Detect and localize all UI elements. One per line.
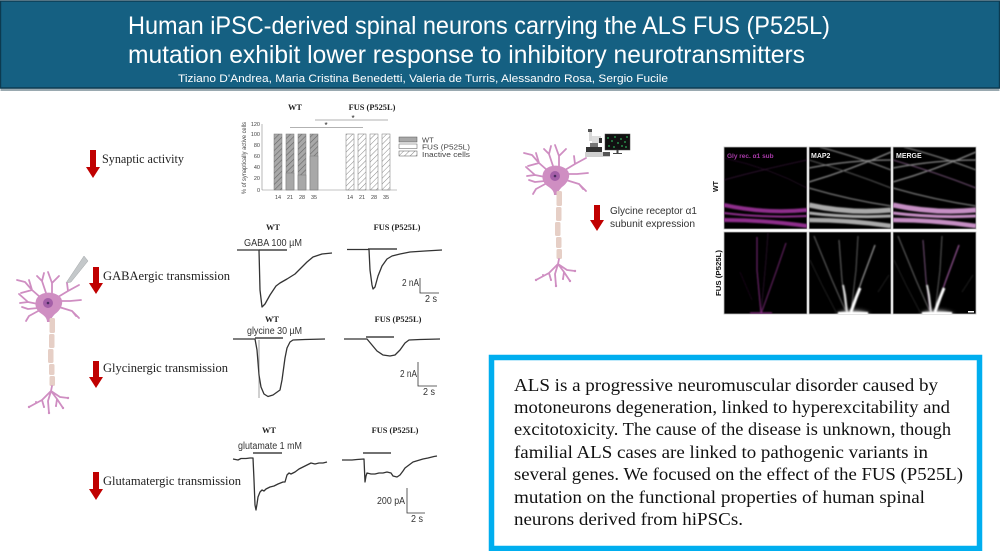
y axis: 60 bbox=[254, 154, 260, 160]
panel: Glycinergic transmission bbox=[89, 315, 440, 398]
scale bar: glycine bbox=[400, 362, 437, 398]
x axis: 28 bbox=[299, 195, 305, 201]
trace: GABA WT bbox=[237, 223, 332, 307]
legend: WT bbox=[422, 136, 434, 144]
label: receptor expression: Glycine receptor α1 bbox=[610, 206, 697, 217]
label: receptor expression bbox=[610, 206, 697, 230]
trace: glycine WT: glycine 30 µM bbox=[247, 326, 302, 337]
trace: GABA FUS: FUS (P525L) bbox=[374, 223, 421, 232]
y axis: 0 bbox=[257, 188, 260, 194]
x axis: 14 bbox=[275, 195, 281, 201]
legend bbox=[399, 136, 471, 159]
panel: synaptic activity bbox=[86, 150, 185, 178]
trace: GABA WT: GABA 100 µM bbox=[244, 238, 302, 249]
trace: glycine FUS bbox=[344, 315, 440, 356]
x axis: 35 bbox=[383, 195, 389, 201]
scale bar: glutamate: 200 pA bbox=[377, 496, 405, 507]
y axis: 40 bbox=[254, 165, 260, 171]
label: receptor expression: subunit expression bbox=[610, 219, 695, 230]
scale bar: glycine: 2 nA bbox=[400, 369, 417, 380]
panel: ALS summary text box bbox=[492, 358, 980, 548]
y axis: % of synaptically active cells bbox=[242, 122, 248, 194]
trace: GABA FUS bbox=[347, 223, 442, 289]
x axis: 28 bbox=[371, 195, 377, 201]
icon: microscope bbox=[585, 129, 610, 157]
micrograph: FUS Gly rec bbox=[724, 232, 807, 314]
trace: glutamate FUS bbox=[342, 426, 437, 482]
bar chart: synaptically active cells bbox=[242, 103, 471, 201]
down arrow: GABAergic bbox=[89, 267, 103, 294]
y axis: 20 bbox=[254, 176, 260, 182]
summary text: familial ALS cases are linked to pathogenic variants in bbox=[514, 442, 928, 462]
scale bar: glycine: 2 s bbox=[423, 387, 435, 398]
micrograph grid bbox=[713, 147, 976, 321]
label: GABAergic: GABAergic transmission bbox=[103, 269, 231, 283]
neuron illustration with patch pipette bbox=[17, 256, 88, 414]
down arrow: synaptic activity bbox=[86, 150, 100, 178]
micrograph: WT MAP2: MAP2 bbox=[811, 153, 831, 160]
title banner bbox=[0, 1, 1000, 91]
scale bar: GABA: 2 s bbox=[425, 294, 437, 305]
significance brackets: * bbox=[324, 121, 328, 130]
panel: glycine receptor expression schematic bbox=[524, 129, 697, 287]
x axis: 21 bbox=[359, 195, 365, 201]
label: Glycinergic: Glycinergic transmission bbox=[103, 361, 229, 375]
chart headings: WT bbox=[288, 103, 302, 112]
panel: GABAergic transmission bbox=[89, 223, 442, 307]
micrograph: WT Gly rec bbox=[724, 147, 807, 229]
icon: monitor bbox=[605, 134, 630, 154]
scale bar bbox=[968, 311, 974, 312]
trace: glycine WT bbox=[233, 315, 325, 398]
trace: glutamate WT: WT bbox=[262, 426, 276, 435]
y axis: 120 bbox=[251, 122, 260, 128]
icon: neuron bbox=[524, 145, 588, 287]
trace: glutamate WT: glutamate 1 mM bbox=[238, 441, 302, 452]
legend: FUS (P525L) bbox=[422, 142, 471, 152]
trace: GABA WT: WT bbox=[266, 223, 280, 232]
title bbox=[128, 12, 830, 69]
micrograph: WT merge: MERGE bbox=[896, 153, 922, 160]
row label: WT: WT bbox=[713, 180, 720, 192]
micrograph: WT MAP2 bbox=[809, 147, 891, 229]
down arrow: receptor expression bbox=[590, 205, 604, 231]
scale bar: GABA bbox=[402, 278, 439, 305]
chart headings bbox=[288, 103, 396, 112]
trace: glycine FUS: FUS (P525L) bbox=[375, 315, 422, 324]
summary text: several genes. We focused on the effect of the FUS (P525L) bbox=[514, 464, 963, 485]
chart headings: FUS (P525L) bbox=[349, 103, 396, 112]
label: synaptic activity: Synaptic activity bbox=[102, 152, 185, 166]
summary text bbox=[514, 375, 963, 529]
icon: neuron bbox=[17, 272, 81, 414]
label: Glutamatergic: Glutamatergic transmission bbox=[103, 474, 242, 488]
y axis: 80 bbox=[254, 143, 260, 149]
micrograph: FUS MAP2 bbox=[809, 232, 891, 321]
down arrow: Glutamatergic bbox=[89, 472, 103, 500]
x axis bbox=[262, 190, 397, 201]
trace: glutamate FUS: FUS (P525L) bbox=[372, 426, 419, 435]
title: Human iPSC-derived spinal neurons carrying the ALS FUS (P525L) bbox=[128, 12, 830, 40]
panel: Glutamatergic transmission bbox=[89, 426, 437, 525]
row label: FUS: FUS (P525L) bbox=[716, 250, 723, 296]
authors: Tiziano D'Andrea, Maria Cristina Benedetti, Valeria de Turris, Alessandro Rosa, Sergio Fucile bbox=[178, 73, 668, 85]
significance brackets bbox=[290, 114, 388, 130]
scale bar: glutamate: 2 s bbox=[411, 514, 423, 525]
trace: glycine WT: WT bbox=[265, 315, 279, 324]
scale bar: GABA: 2 nA bbox=[402, 278, 419, 289]
summary text: neurons derived from hiPSCs. bbox=[514, 509, 743, 529]
legend: Inactive cells bbox=[422, 150, 470, 159]
significance brackets: * bbox=[351, 114, 355, 123]
summary text: motoneurons degeneration, linked to hyperexcitability and bbox=[514, 397, 950, 417]
y axis: 100 bbox=[251, 132, 260, 138]
x axis: 14 bbox=[347, 195, 353, 201]
scale bar: glutamate bbox=[377, 488, 425, 525]
micrograph: WT Gly rec: Gly rec. α1 sub bbox=[727, 153, 774, 160]
FUS bars bbox=[346, 134, 390, 190]
icon: pipette bbox=[66, 256, 88, 283]
micrograph: FUS merge bbox=[893, 232, 976, 321]
down arrow: Glycinergic bbox=[89, 361, 103, 388]
y axis bbox=[242, 122, 262, 194]
summary text: ALS is a progressive neuromuscular disorder caused by bbox=[514, 375, 938, 395]
summary text: excitotoxicity. The cause of the disease is unknown, though bbox=[514, 419, 951, 439]
WT bars bbox=[274, 134, 318, 190]
title: mutation exhibit lower response to inhibitory neurotransmitters bbox=[128, 41, 805, 69]
x axis: 21 bbox=[287, 195, 293, 201]
x axis: 35 bbox=[311, 195, 317, 201]
trace: glutamate WT bbox=[233, 426, 327, 510]
summary text: mutation on the functional properties of human spinal bbox=[514, 487, 925, 507]
micrograph: WT merge bbox=[893, 147, 976, 229]
